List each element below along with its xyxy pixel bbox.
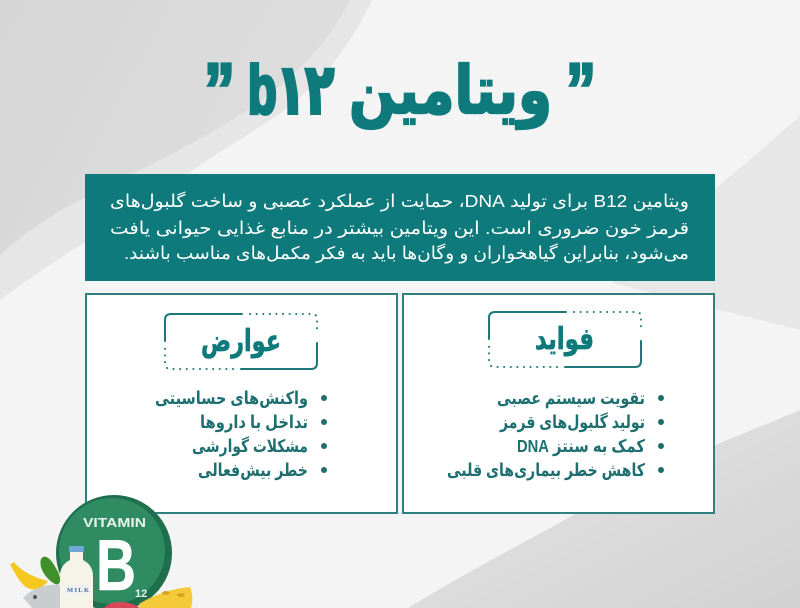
badge circle bbox=[56, 495, 172, 608]
list: side effects: تداخل با داروها bbox=[200, 412, 308, 433]
panel: benefits bbox=[403, 294, 714, 513]
list: side effects: خطر بیش‌فعالی bbox=[198, 460, 308, 481]
heading: benefits: فواید bbox=[535, 323, 594, 356]
title: opening quote: ” bbox=[566, 48, 596, 133]
big letter B: B bbox=[96, 526, 136, 606]
heading frame: side effects bbox=[165, 314, 317, 369]
list: side effects: واکنش‌های حساسیتی bbox=[155, 388, 308, 409]
panel: intro bbox=[85, 174, 715, 281]
list: side effects bbox=[155, 388, 327, 481]
icon: milk bottle bbox=[60, 546, 93, 608]
list: benefits: کاهش خطر بیماری‌های قلبی bbox=[447, 460, 646, 481]
vitamin b12 illustration bbox=[10, 495, 192, 608]
heading: side effects: عوارض bbox=[201, 325, 281, 358]
icon: milk bottle: MILK bbox=[67, 587, 89, 594]
icon: banana bbox=[10, 562, 48, 589]
icon: cheese bbox=[139, 587, 192, 608]
list: benefits: تولید گلبول‌های قرمز bbox=[499, 412, 645, 433]
intro text: ویتامین B12 برای تولید DNA، حمایت از عملکرد عصبی و ساخت گلبول‌های bbox=[110, 191, 689, 212]
list: benefits: تقویت سیستم عصبی bbox=[497, 388, 645, 409]
icon: fish bbox=[23, 585, 62, 608]
title bbox=[204, 48, 596, 133]
badge label: VITAMIN bbox=[83, 515, 146, 530]
list: benefits bbox=[447, 388, 664, 481]
icon: cucumber bbox=[40, 557, 60, 584]
heading frame: benefits bbox=[489, 312, 641, 367]
title: b12: b۱۲ bbox=[248, 52, 334, 128]
title: word vitamin: ویتامین bbox=[349, 53, 552, 130]
title: closing quote: ” bbox=[204, 48, 235, 133]
intro text bbox=[110, 191, 689, 264]
list: benefits: کمک به سنتز DNA bbox=[517, 436, 646, 457]
subscript 12: 12 bbox=[135, 588, 147, 600]
icon: meat bbox=[104, 602, 140, 608]
intro text: قرمز خون ضروری است. این ویتامین بیشتر در منابع غذایی حیوانی یافت bbox=[110, 218, 689, 239]
panel: side effects bbox=[86, 294, 397, 513]
intro text: می‌شود، بنابراین گیاهخواران و وگان‌ها باید به فکر مکمل‌های مناسب باشند. bbox=[124, 243, 689, 264]
list: side effects: مشکلات گوارشی bbox=[192, 436, 308, 457]
